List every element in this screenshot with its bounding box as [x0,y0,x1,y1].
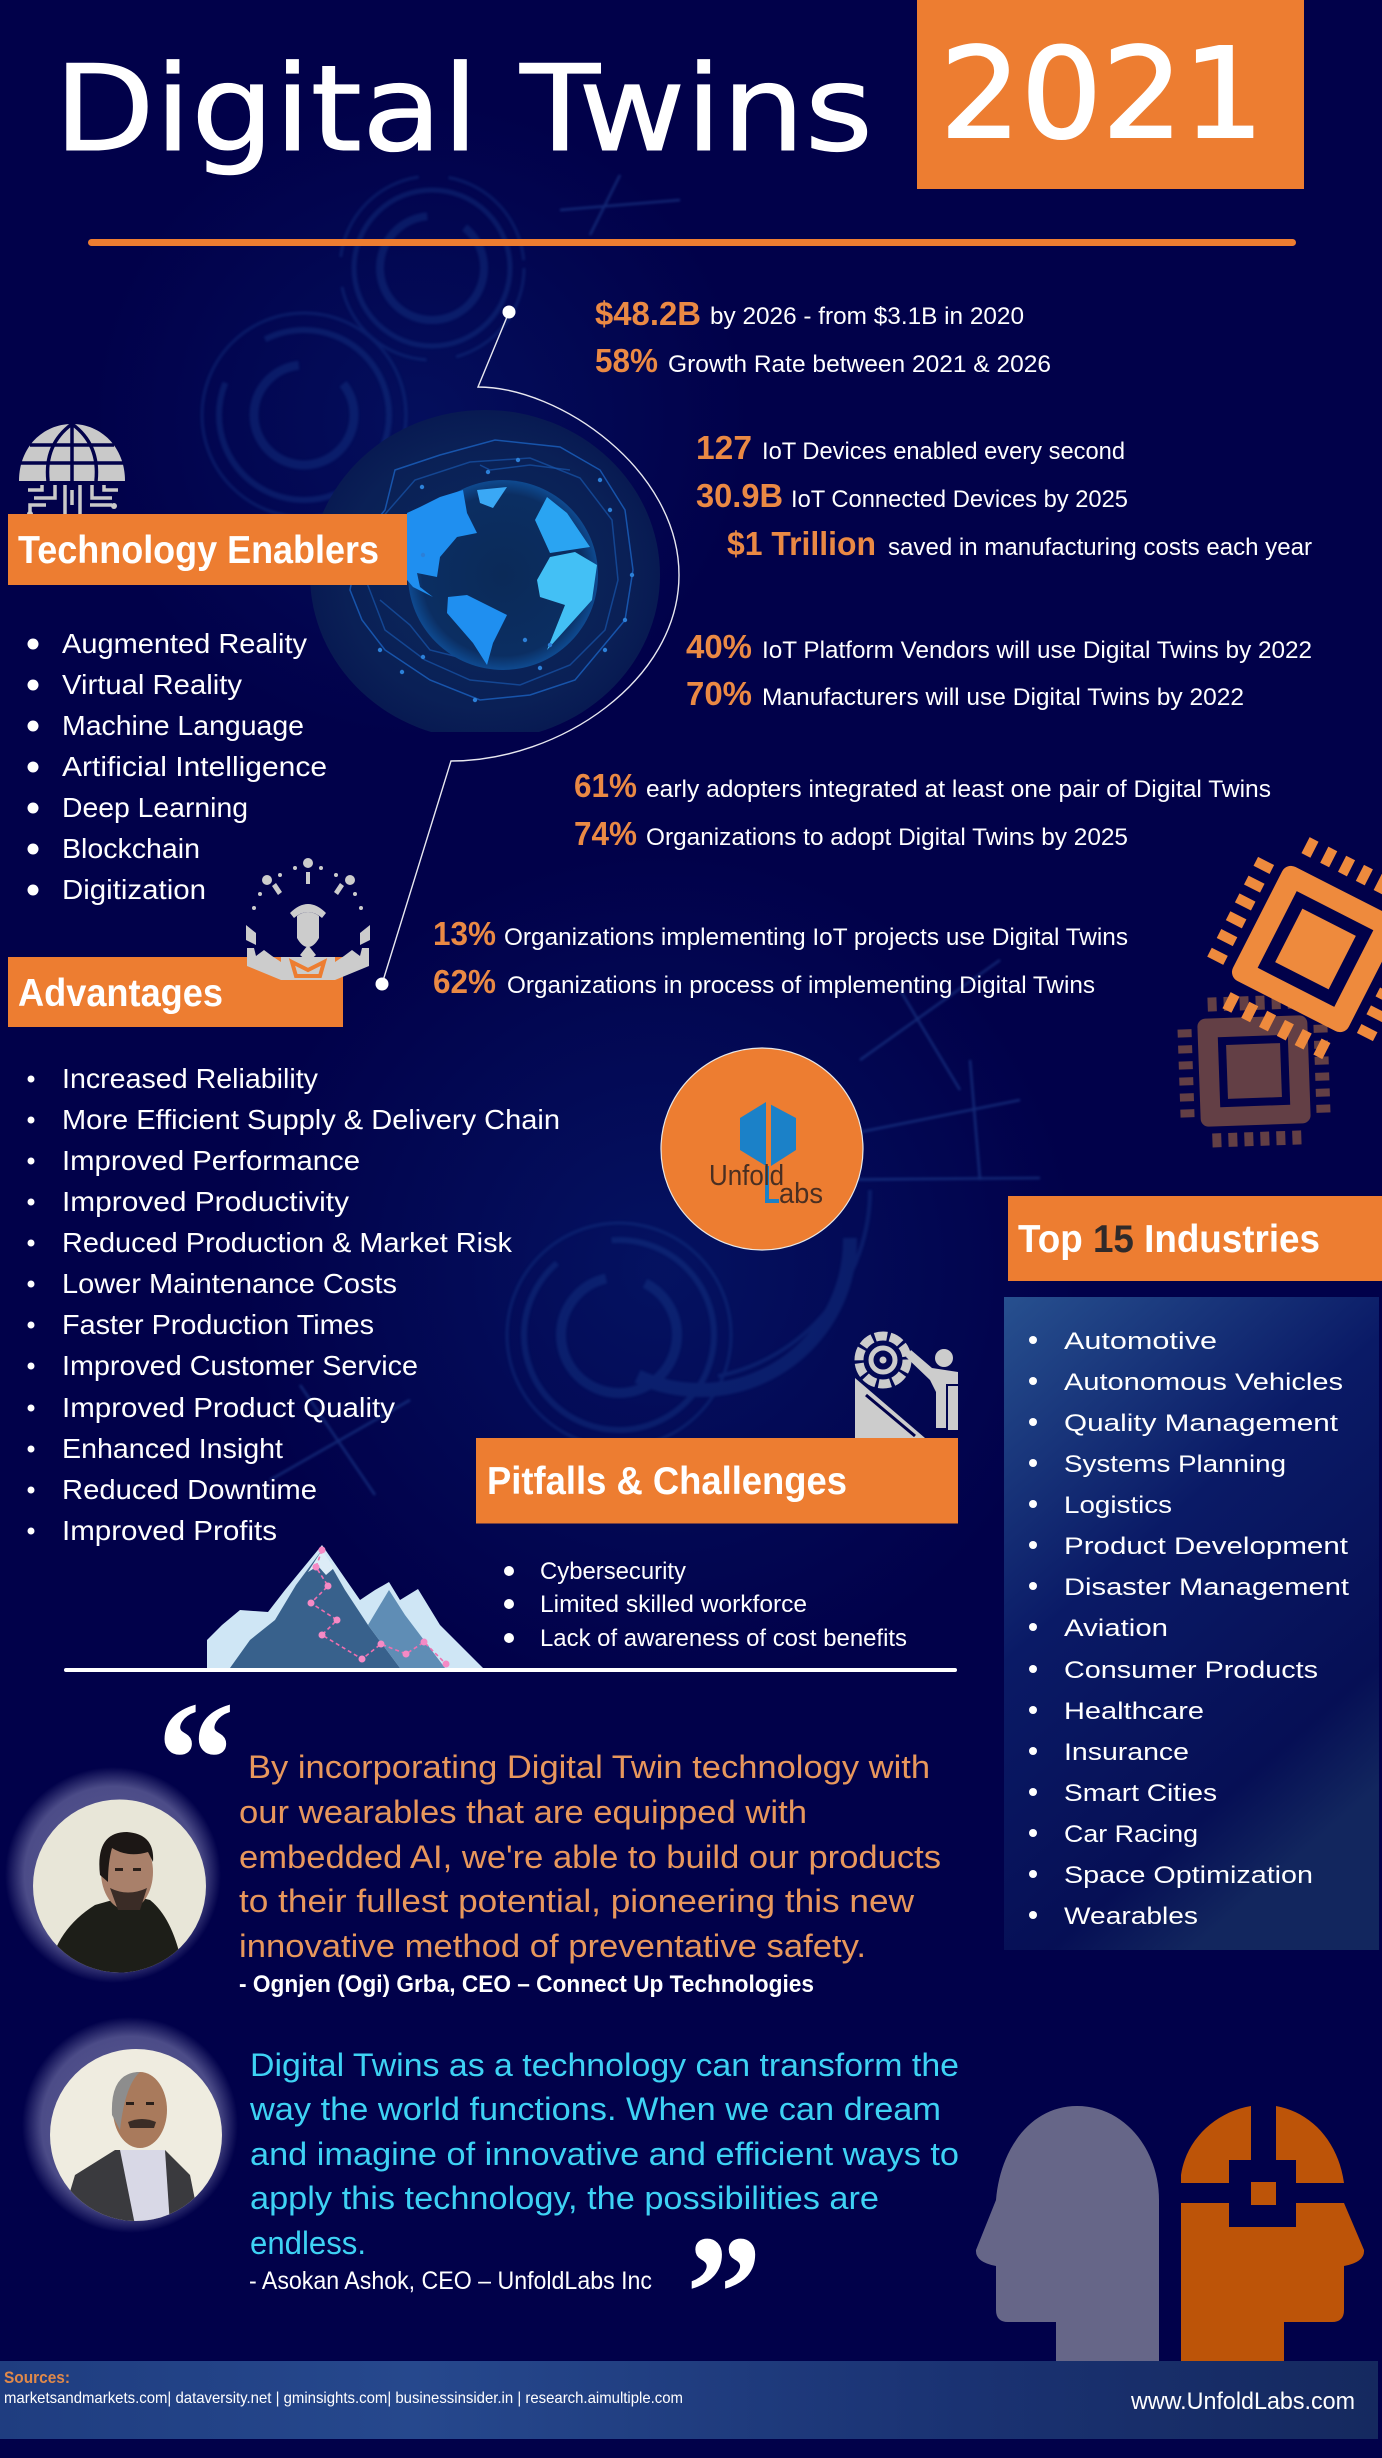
list: advantages: Faster Production Times [62,1309,374,1340]
icon: twin heads [976,2106,1364,2361]
icon: digital globe with circuits [19,424,125,526]
stat: early adopters [574,767,1271,804]
footer band: marketsandmarkets.com| dataversity.net | gminsights.com| businessinsider.in | research.aimultiple.com [4,2390,683,2407]
stat: iot projects [433,915,1128,952]
list: technology enablers [28,628,327,905]
panel: top 15 industries list: Quality Management [1064,1410,1338,1437]
icon: opening quote mark: “ [157,1667,235,1851]
quote: Ognjen Grba: - Ognjen (Ogi) Grba, CEO – Connect Up Technologies [239,1971,814,1998]
icon: orange head [1181,2106,1364,2361]
stat: early adopters: early adopters integrated at least one pair of Digital Twins [646,776,1271,803]
stat: market size [595,295,1024,332]
list: technology enablers: Blockchain [62,833,200,864]
list: advantages: Reduced Production & Market Risk [62,1227,513,1258]
icon: mountain with route [207,1545,483,1668]
list: pitfalls: Cybersecurity [540,1558,686,1585]
year badge [917,0,1304,189]
panel: top 15 industries list: Logistics [1064,1492,1172,1519]
background decoration: gears and glows [90,100,1080,1690]
list: technology enablers: Artificial Intelligence [62,751,327,782]
heading: top 15 industries [1008,1196,1382,1281]
quote: Asokan Ashok: and imagine of innovative and efficient ways to [250,2136,959,2172]
list: technology enablers: Augmented Reality [62,628,307,659]
portrait: Ognjen Grba [5,1767,221,1983]
stat: connected devices [696,477,1128,514]
quote: Ognjen Grba [239,1749,941,1998]
white divider [64,1668,957,1672]
list: advantages: Improved Product Quality [62,1392,395,1423]
stat: in process: Organizations in process of implementing Digital Twins [507,972,1095,999]
list: advantages: Improved Customer Service [62,1350,418,1381]
stat: market size: by 2026 - from $3.1B in 2020 [710,303,1024,330]
heading: top 15 industries: Top 15 Industries [1018,1218,1320,1261]
logo: UnfoldLabs circle: Unfold [709,1160,784,1192]
quote: Asokan Ashok: endless. [250,2225,366,2261]
stat: iot devices per second: 127 [696,429,752,466]
list: advantages: Improved Productivity [62,1186,349,1217]
quote: Ognjen Grba: innovative method of preventative safety. [239,1928,866,1964]
stat: manufacturers [686,675,1244,712]
stat: iot devices per second [696,429,1125,466]
stat: in process [433,963,1095,1000]
panel: top 15 industries list: Consumer Products [1064,1657,1318,1684]
icon: grey head [976,2106,1159,2361]
list: pitfalls: Limited skilled workforce [540,1591,807,1618]
icon: closing quote mark: ” [686,2201,762,2385]
list: advantages [28,1063,560,1546]
stat: early adopters: 61% [574,767,637,804]
stat: market size: $48.2B [595,295,701,332]
heading: pitfalls and challenges: Pitfalls & Challenges [487,1460,847,1503]
heading: technology enablers: Technology Enablers [18,529,379,572]
panel: top 15 industries list: Disaster Management [1064,1574,1349,1601]
stat: growth rate: 58% [595,342,658,379]
stat: iot projects: Organizations implementing IoT projects use Digital Twins [504,924,1128,951]
panel: top 15 industries list: Healthcare [1064,1698,1204,1725]
stat: savings [727,525,1312,562]
footer band: Sources: [4,2368,70,2387]
list: pitfalls [504,1558,907,1652]
panel: top 15 industries list: Smart Cities [1064,1780,1217,1807]
stat: in process: 62% [433,963,496,1000]
stat: platform vendors: 40% [686,628,752,665]
quote: Asokan Ashok [249,2047,959,2295]
panel: top 15 industries list: Automotive [1064,1328,1217,1355]
panel: top 15 industries list: Systems Planning [1064,1451,1286,1478]
heading: advantages: Advantages [18,972,223,1015]
stat: savings: saved in manufacturing costs each year [888,534,1312,561]
stat: platform vendors: IoT Platform Vendors will use Digital Twins by 2022 [762,637,1312,664]
list: technology enablers: Virtual Reality [62,669,242,700]
heading: technology enablers [8,514,407,585]
list: technology enablers: Digitization [62,874,206,905]
stat: connected devices: IoT Connected Devices by 2025 [791,486,1128,513]
stat: manufacturers: Manufacturers will use Digital Twins by 2022 [762,684,1244,711]
stat: manufacturers: 70% [686,675,752,712]
list: advantages: Improved Performance [62,1145,360,1176]
list: advantages: More Efficient Supply & Delivery Chain [62,1104,560,1135]
stat: platform vendors [686,628,1312,665]
list: advantages: Improved Profits [62,1515,277,1546]
stat: connected devices: 30.9B [696,477,783,514]
stat: growth rate [595,342,1051,379]
icon: engineer with gauge [246,858,370,980]
panel: top 15 industries list [1004,1297,1379,1950]
stat: iot projects: 13% [433,915,496,952]
globe [310,410,660,740]
stat: savings: $1 Trillion [727,525,876,562]
panel: top 15 industries list: Insurance [1064,1739,1189,1766]
connector curve with end dots [376,306,679,990]
stat: organizations 2025: 74% [574,815,637,852]
footer band: www.UnfoldLabs.com [1130,2388,1355,2415]
list: advantages: Enhanced Insight [62,1433,283,1464]
heading: pitfalls and challenges [476,1438,958,1524]
quote: Ognjen Grba: our wearables that are equipped with [239,1794,807,1830]
quote: Ognjen Grba: By incorporating Digital Twin technology with [248,1749,930,1785]
stat: iot devices per second: IoT Devices enabled every second [762,438,1125,465]
heading: advantages [8,957,343,1027]
panel: top 15 industries list: Aviation [1064,1615,1168,1642]
stat: organizations 2025 [574,815,1128,852]
logo: UnfoldLabs circle [661,1048,863,1250]
panel: top 15 industries list: Car Racing [1064,1821,1198,1848]
quote: Asokan Ashok: apply this technology, the possibilities are [250,2180,879,2216]
globe continents [407,487,597,665]
panel: top 15 industries list: Space Optimization [1064,1862,1313,1889]
year badge: 2021 [940,22,1264,167]
footer band [0,2361,1378,2439]
icon: large chip [1190,820,1382,1076]
panel: top 15 industries list: Product Development [1064,1533,1348,1560]
list: pitfalls: Lack of awareness of cost benefits [540,1625,907,1652]
panel: top 15 industries list: Autonomous Vehicles [1064,1369,1343,1396]
list: advantages: Reduced Downtime [62,1474,317,1505]
portrait: Asokan Ashok [22,2017,238,2233]
list: advantages: Increased Reliability [62,1063,318,1094]
stat: organizations 2025: Organizations to adopt Digital Twins by 2025 [646,824,1128,851]
quote: Asokan Ashok: way the world functions. When we can dream [249,2091,941,2127]
logo: UnfoldLabs circle: abs [779,1178,823,1210]
quote: Asokan Ashok: Digital Twins as a technology can transform the [250,2047,959,2083]
quote: Ognjen Grba: embedded AI, we're able to build our products [239,1839,941,1875]
title: Digital Twins [54,41,873,179]
list: technology enablers: Machine Language [62,710,304,741]
quote: Ognjen Grba: to their fullest potential, pioneering this new [239,1883,915,1919]
icon: small chip [1176,993,1332,1149]
icon: person turning gear [855,1336,958,1438]
list: technology enablers: Deep Learning [62,792,248,823]
orange title rule [88,239,1296,246]
quote: Asokan Ashok: - Asokan Ashok, CEO – UnfoldLabs Inc [249,2267,652,2295]
panel: top 15 industries list: Wearables [1064,1903,1198,1930]
list: advantages: Lower Maintenance Costs [62,1268,397,1299]
stat: growth rate: Growth Rate between 2021 & 2026 [668,351,1051,378]
